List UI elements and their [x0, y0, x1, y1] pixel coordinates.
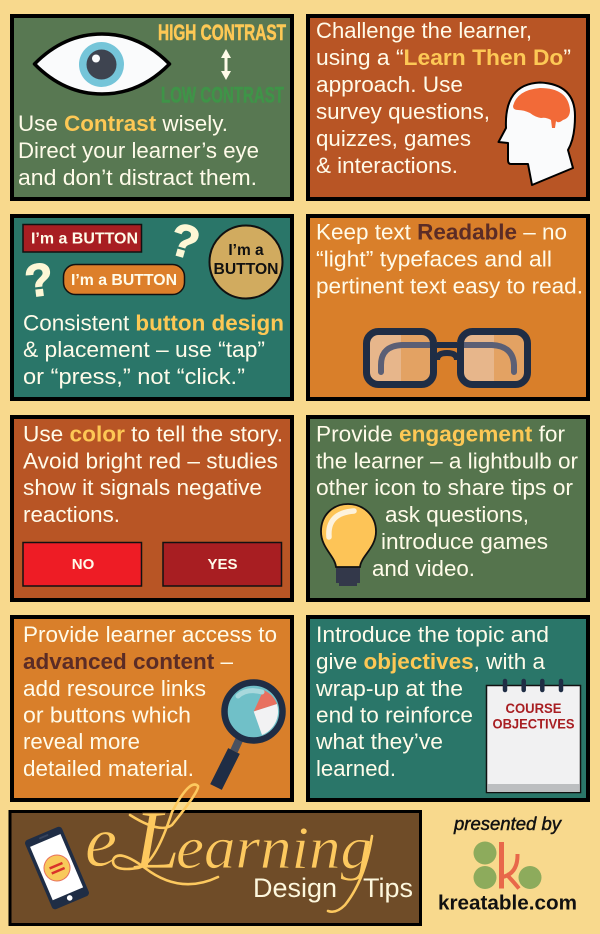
text: design tips: [253, 873, 413, 903]
text: objectives tip: give objectives, with a: [316, 649, 545, 674]
text: objectives tip: learned.: [316, 756, 396, 781]
text: readable tip: Keep text Readable – no: [316, 220, 567, 244]
title: eLearning: e: [85, 802, 117, 882]
text: advanced content tip: detailed material.: [23, 756, 194, 781]
text: challenge tip: [316, 18, 571, 178]
text: challenge tip: using a “Learn Then Do”: [316, 45, 571, 70]
panel: engagement: [308, 417, 588, 600]
text: engagement tip: Provide engagement for: [316, 422, 566, 446]
text: button tip: & placement – use “tap”: [23, 337, 265, 362]
button: yes: YES: [207, 556, 238, 573]
icon: question mark: ?: [164, 212, 205, 270]
panel: color: [12, 417, 292, 600]
text: contrast tip: Direct your learner’s eye: [18, 138, 259, 163]
panel: use contrast: [12, 16, 292, 199]
icon: notebook: COURSE: [506, 701, 562, 716]
button: no: [23, 542, 142, 586]
icon: notebook: OBJECTIVES: [492, 716, 574, 732]
text: kreatable.com: kreatable.com: [438, 892, 577, 914]
text: objectives tip: end to reinforce: [316, 702, 473, 728]
icon: eye: [34, 34, 170, 94]
title: eLearning: L: [133, 794, 180, 887]
panel: advanced content: [12, 617, 292, 800]
text: engagement tip: [316, 422, 579, 581]
text: button tip: Consistent button design: [23, 310, 284, 336]
icon: head with brain: [498, 82, 575, 185]
icon: glasses: [366, 332, 528, 384]
heading: high contrast: HIGH CONTRAST: [158, 20, 286, 45]
text: color tip: show it signals negative: [23, 475, 262, 500]
panel: button design: [12, 212, 292, 399]
text: readable tip: pertinent text easy to read.: [316, 274, 583, 298]
decorative flourish: script swashes: [113, 784, 372, 912]
text: advanced content tip: advanced content –: [23, 649, 233, 674]
panel: objectives: [308, 617, 588, 800]
text: color tip: [23, 422, 283, 527]
icon: lightbulb: [321, 504, 376, 586]
text: advanced content tip: or buttons which: [23, 702, 191, 728]
text: contrast tip: and don’t distract them.: [18, 165, 257, 190]
banner: title: [10, 784, 420, 924]
text: button tip: [23, 310, 284, 389]
panel: readable: [308, 216, 588, 399]
text: engagement tip: and video.: [372, 556, 475, 581]
text: design tips: Design: [253, 873, 337, 903]
icon: notebook: [486, 681, 580, 792]
button: circle: [210, 226, 282, 298]
text: contrast tip: Use Contrast wisely.: [18, 111, 228, 136]
text: engagement tip: introduce games: [381, 529, 548, 554]
title: eLearning: earning: [176, 815, 372, 881]
text: engagement tip: other icon to share tips or: [316, 475, 574, 500]
text: advanced content tip: add resource links: [23, 676, 206, 701]
text: advanced content tip: [23, 622, 277, 781]
text: challenge tip: approach. Use: [316, 72, 463, 97]
button: circle: BUTTON: [214, 261, 278, 278]
text: contrast tip: [18, 111, 259, 190]
button: rounded: I’m a BUTTON: [71, 272, 177, 289]
icon: magnifying glass: [216, 682, 282, 787]
text: objectives tip: [315, 622, 549, 781]
text: engagement tip: ask questions,: [385, 502, 529, 527]
text: color tip: reactions.: [23, 502, 120, 527]
text: color tip: Use color to tell the story.: [23, 422, 283, 446]
text: advanced content tip: reveal more: [23, 729, 140, 754]
text: color tip: Avoid bright red – studies: [23, 448, 278, 474]
icon: double arrow: [221, 49, 231, 80]
button: rounded: [64, 264, 184, 294]
text: design tips: Tips: [363, 873, 413, 903]
text: challenge tip: Challenge the learner,: [316, 18, 532, 43]
text: challenge tip: survey questions,: [316, 99, 490, 124]
button: circle: I’m a: [228, 242, 264, 259]
text: readable tip: [316, 220, 583, 298]
text: readable tip: “light” typefaces and all: [316, 246, 552, 272]
button: rectangular: [23, 224, 142, 252]
text: engagement tip: the learner – a lightbulb or: [316, 448, 579, 474]
text: objectives tip: Introduce the topic and: [316, 622, 549, 647]
button: no: NO: [72, 556, 95, 573]
icon: question mark: ?: [22, 252, 56, 307]
text: challenge tip: & interactions.: [316, 153, 458, 178]
button: rectangular: I’m a BUTTON: [31, 230, 138, 248]
heading: low contrast: LOW CONTRAST: [161, 82, 284, 108]
text: challenge tip: quizzes, games: [316, 126, 471, 151]
panel: learn then do: [308, 16, 588, 199]
button: yes: [163, 542, 282, 586]
text: objectives tip: wrap-up at the: [315, 676, 463, 701]
text: button tip: or “press,” not “click.”: [23, 364, 245, 389]
icon: phone: [24, 826, 90, 910]
logo: kreatable: [474, 842, 542, 889]
credit: presented by: presented by: [453, 814, 562, 834]
text: advanced content tip: Provide learner access to: [23, 622, 277, 647]
text: objectives tip: what they’ve: [315, 729, 443, 754]
title: eLearning: [85, 784, 372, 912]
